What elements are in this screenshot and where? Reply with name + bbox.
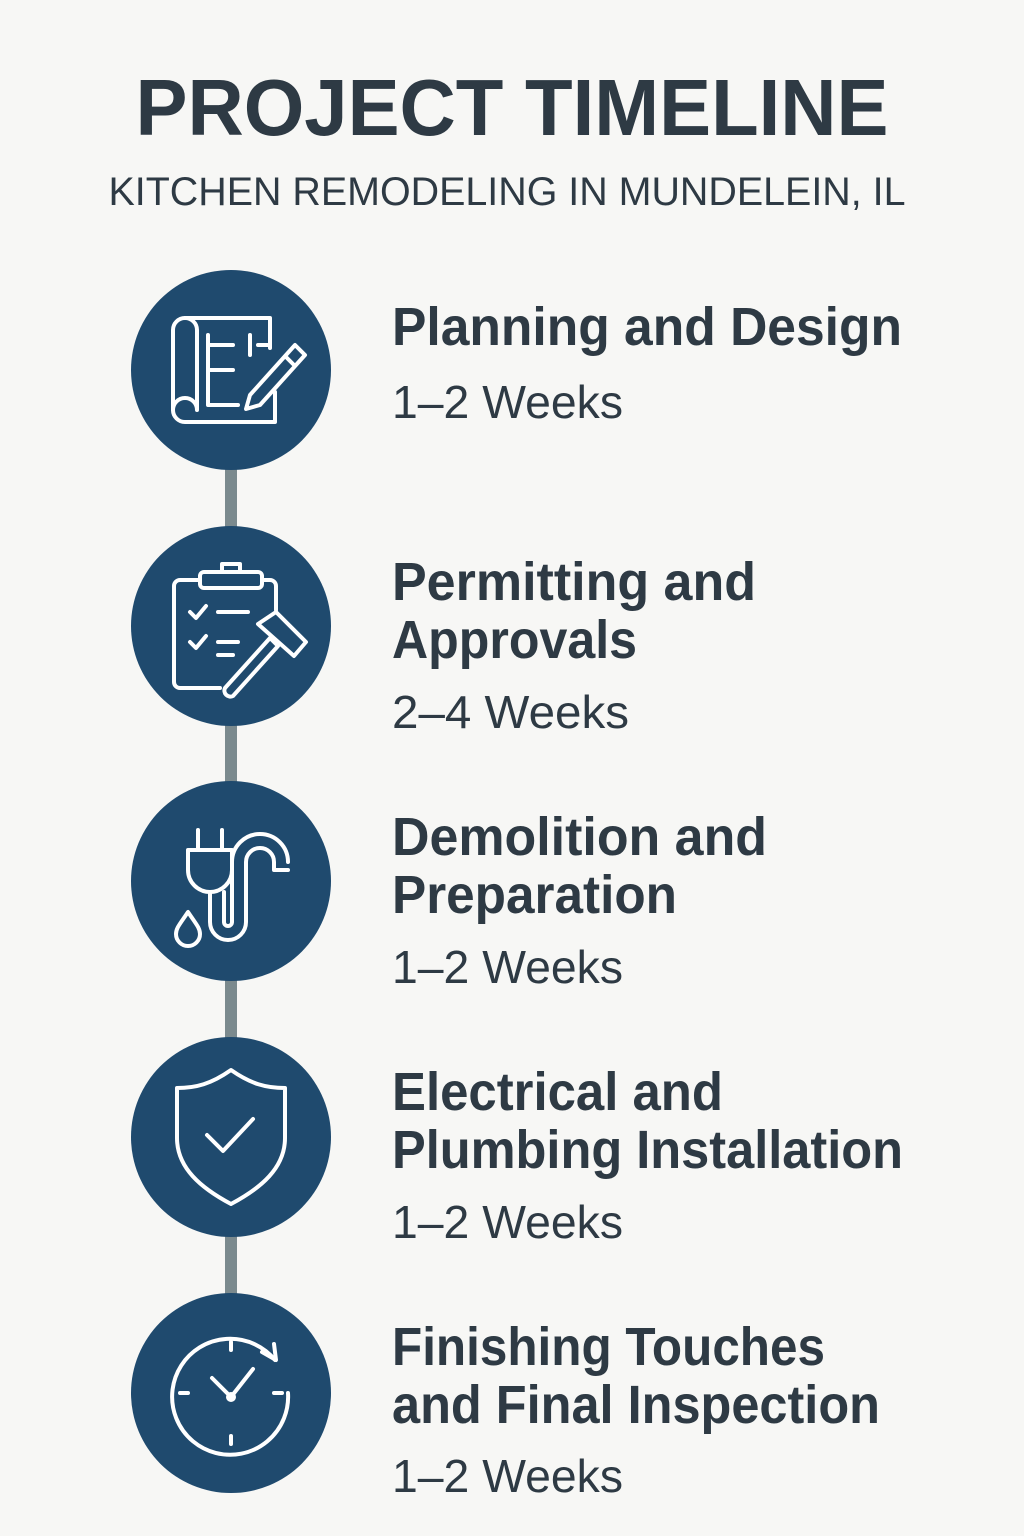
heading: Electrical and: [392, 1062, 723, 1122]
icon: plug and pipe: [131, 781, 331, 981]
duration: 1–2 Weeks: [392, 941, 623, 993]
heading: Permitting and: [392, 552, 756, 612]
timeline connector: [225, 370, 237, 1393]
step 4: electrical and plumbing: [131, 1037, 903, 1248]
step 4: electrical and plumbing: Plumbing Installation: [392, 1120, 903, 1180]
heading: Finishing Touches: [392, 1317, 825, 1377]
step 3: demolition and preparation: [131, 781, 767, 993]
heading: Planning and Design: [392, 297, 902, 357]
icon: clock: [131, 1293, 331, 1493]
icon: blueprint and pencil: [131, 270, 331, 470]
icon: shield with check: [131, 1037, 331, 1237]
icon: clipboard and hammer: [131, 526, 331, 726]
heading: Demolition and: [392, 807, 767, 867]
duration: 1–2 Weeks: [392, 1196, 623, 1248]
step 1: planning and design: [131, 270, 902, 470]
subtitle: KITCHEN REMODELING IN MUNDELEIN, IL: [108, 170, 906, 214]
title: PROJECT TIMELINE: [136, 63, 888, 152]
step 3: demolition and preparation: Preparation: [392, 865, 677, 925]
step 2: permitting and approvals: [131, 526, 756, 738]
step 5: finishing touches: [131, 1293, 880, 1502]
duration: 1–2 Weeks: [392, 1450, 623, 1502]
duration: 1–2 Weeks: [392, 376, 623, 428]
step 2: permitting and approvals: Approvals: [392, 610, 637, 670]
duration: 2–4 Weeks: [392, 686, 629, 738]
step 5: finishing touches: and Final Inspection: [392, 1375, 880, 1435]
